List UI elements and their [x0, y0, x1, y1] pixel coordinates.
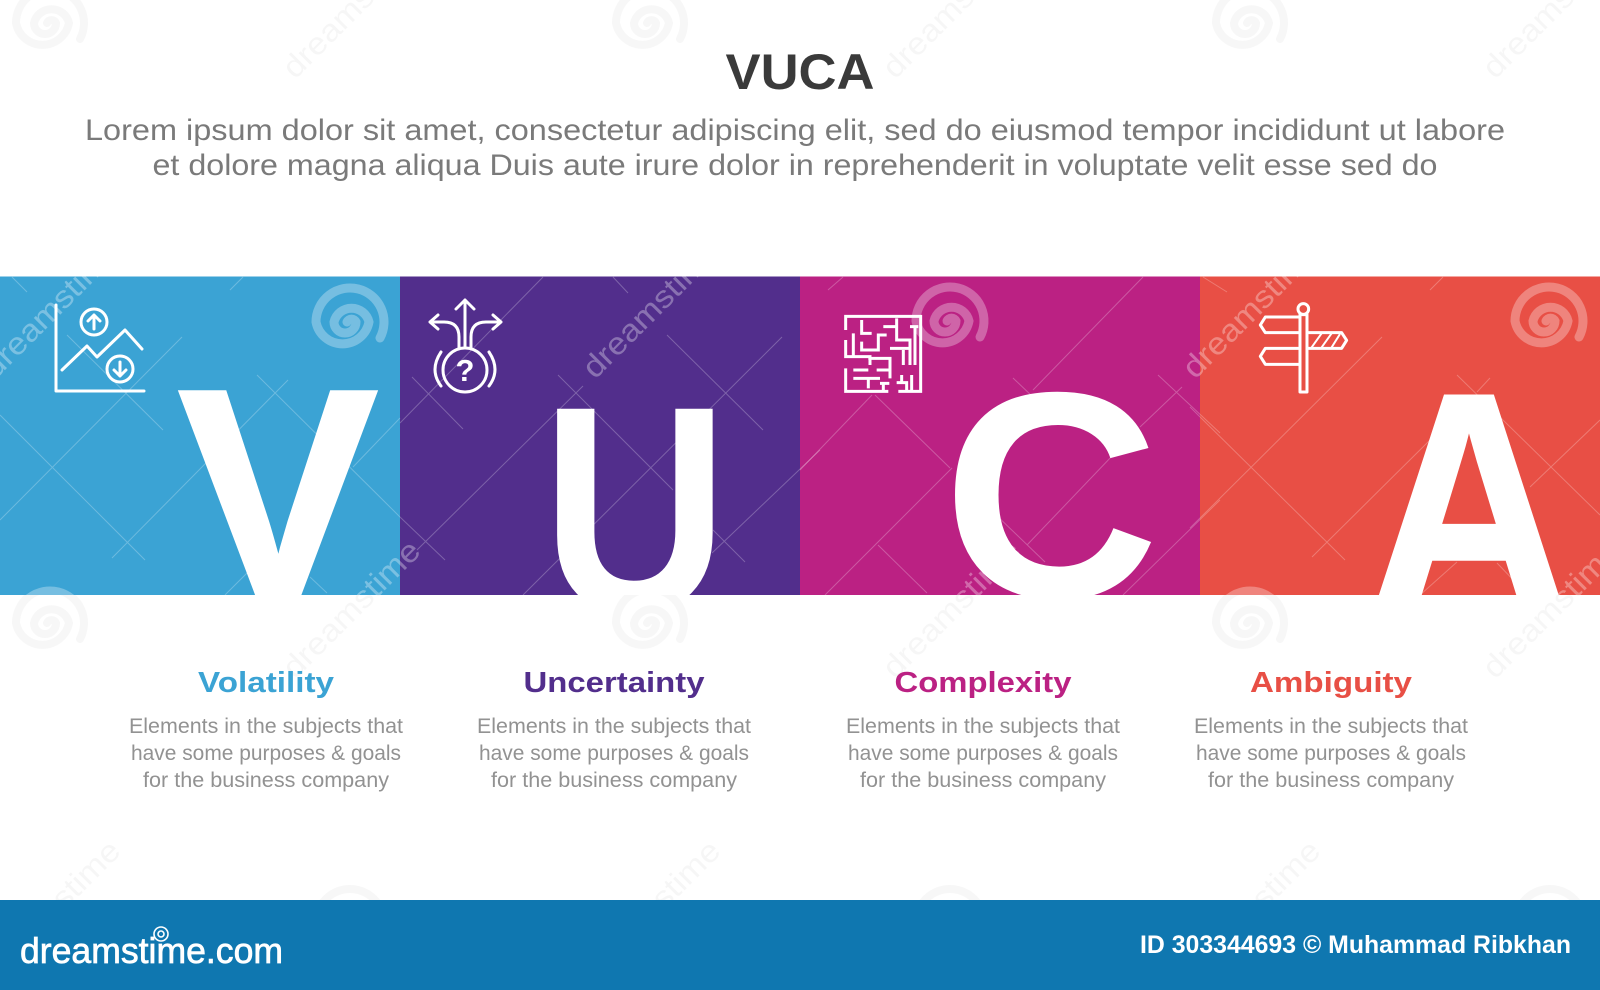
subtitle text block: Lorem ipsum dolor sit amet, consectetur adipiscing elit, sed do eiusmod tempor incididunt ut labore — [85, 114, 1505, 147]
footer logo: dreamstime.com — [20, 930, 283, 971]
text: dreamstime — [875, 533, 1027, 685]
column text: volatility: Volatility — [198, 667, 334, 699]
column text: uncertainty — [477, 667, 751, 792]
icon: uncertain paths: ? — [456, 353, 474, 388]
column text: uncertainty: Elements in the subjects that — [477, 714, 751, 738]
footer bar — [0, 900, 1600, 990]
icon: maze — [846, 316, 921, 391]
column text: uncertainty: Uncertainty — [524, 667, 704, 699]
subtitle text block: et dolore magna aliqua Duis aute irure dolor in reprehenderit in voluptate velit esse sed do — [152, 149, 1438, 182]
watermark text on panels — [0, 276, 1600, 595]
panel: volatility — [0, 276, 400, 595]
watermark text on panels: dreamstime — [875, 533, 1027, 685]
column text: volatility: have some purposes & goals — [131, 741, 401, 765]
text: dreamstime — [575, 833, 727, 985]
title: VUCA — [726, 44, 874, 100]
column text: complexity: have some purposes & goals — [848, 741, 1118, 765]
column text: complexity: Elements in the subjects that — [846, 714, 1120, 738]
column text: volatility: for the business company — [143, 768, 389, 792]
panel: uncertainty — [400, 276, 800, 595]
watermark text on panels: dreamstime — [275, 533, 427, 685]
text: dreamstime — [1175, 833, 1327, 985]
panel: complexity — [800, 276, 1200, 595]
icon: uncertain paths — [430, 300, 501, 392]
big letter A: A — [1366, 327, 1572, 685]
big letter C: C — [943, 331, 1159, 659]
watermark text on panels: dreamstime — [1175, 233, 1327, 385]
image id and credit: ID 303344693 © Muhammad Ribkhan — [1140, 931, 1571, 959]
watermark spirals on panels — [26, 282, 1588, 595]
subtitle text block — [85, 114, 1505, 182]
column text: uncertainty: for the business company — [491, 768, 737, 792]
icon: volatility chart — [56, 305, 144, 391]
column text: complexity: Complexity — [894, 667, 1072, 699]
column text: ambiguity: Elements in the subjects that — [1194, 714, 1468, 738]
big letter U: U — [542, 345, 728, 674]
column text: ambiguity: for the business company — [1208, 768, 1454, 792]
column text: volatility — [129, 667, 403, 792]
icon: signpost — [1260, 304, 1347, 392]
big letter V: V — [178, 328, 379, 656]
text: dreamstime — [275, 533, 427, 685]
column text: ambiguity: have some purposes & goals — [1196, 741, 1466, 765]
column text: uncertainty: have some purposes & goals — [479, 741, 749, 765]
watermark text on panels: dreamstime — [575, 233, 727, 385]
panel: ambiguity — [1200, 276, 1600, 595]
watermark lines on panels — [0, 277, 1600, 595]
column text: volatility: Elements in the subjects that — [129, 714, 403, 738]
column text: complexity: for the business company — [860, 768, 1106, 792]
column text: ambiguity: Ambiguity — [1250, 667, 1412, 699]
column text: ambiguity — [1194, 667, 1468, 792]
column text: complexity — [846, 667, 1120, 792]
